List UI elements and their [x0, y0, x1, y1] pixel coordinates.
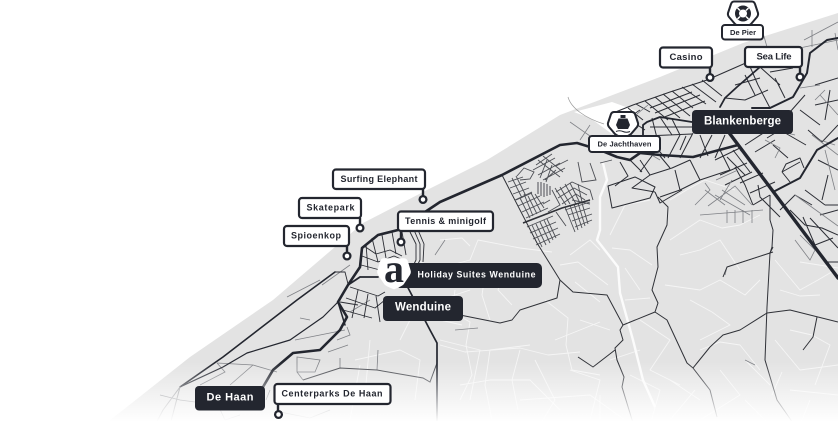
label: Skatepark — [299, 198, 363, 231]
label: Blankenberge — [692, 110, 793, 134]
label: Casino — [660, 48, 713, 81]
icon: boat — [616, 115, 630, 132]
logo: a: a — [384, 246, 404, 291]
label: Wenduine: Wenduine — [395, 302, 451, 314]
label: Wenduine — [383, 296, 463, 321]
label: Casino: Casino — [670, 52, 703, 63]
label: Holiday Suites Wenduine: Holiday Suites Wenduine — [418, 270, 536, 280]
rural dark lanes — [460, 175, 838, 423]
bottom fade — [0, 362, 838, 422]
label: De Jachthaven — [589, 112, 660, 152]
icon: lifebuoy — [737, 8, 749, 20]
label: Blankenberge: Blankenberge — [704, 116, 781, 128]
white field roads — [350, 180, 838, 425]
label: Sea Life: Sea Life — [756, 51, 792, 62]
label: Surfing Elephant — [333, 170, 426, 203]
grey street detail — [160, 22, 838, 420]
label: Tennis & minigolf — [398, 212, 493, 245]
label: Centerparks De Haan: Centerparks De Haan — [282, 388, 382, 398]
label: Spioenkop: Spioenkop — [291, 230, 342, 240]
label: De Haan: De Haan — [206, 392, 254, 404]
label: De Haan — [195, 386, 265, 410]
label: Spioenkop — [284, 226, 350, 259]
label: De Jachthaven: De Jachthaven — [598, 140, 652, 148]
label: Tennis & minigolf: Tennis & minigolf — [405, 216, 487, 226]
bottom white band — [0, 421, 838, 428]
label: De Pier — [722, 2, 763, 40]
label: Holiday Suites Wenduine — [378, 246, 542, 291]
Wenduine street network — [335, 230, 424, 322]
main coastal road — [155, 38, 838, 428]
label: Skatepark: Skatepark — [306, 202, 355, 212]
label: Surfing Elephant: Surfing Elephant — [340, 174, 418, 184]
label: Centerparks De Haan — [274, 384, 390, 418]
label: De Pier: De Pier — [730, 28, 756, 37]
label: Sea Life — [745, 47, 803, 80]
Blankenberge street network — [608, 58, 838, 262]
suburb street grid — [508, 154, 612, 247]
white canal — [597, 163, 655, 407]
De Haan road — [303, 363, 437, 382]
